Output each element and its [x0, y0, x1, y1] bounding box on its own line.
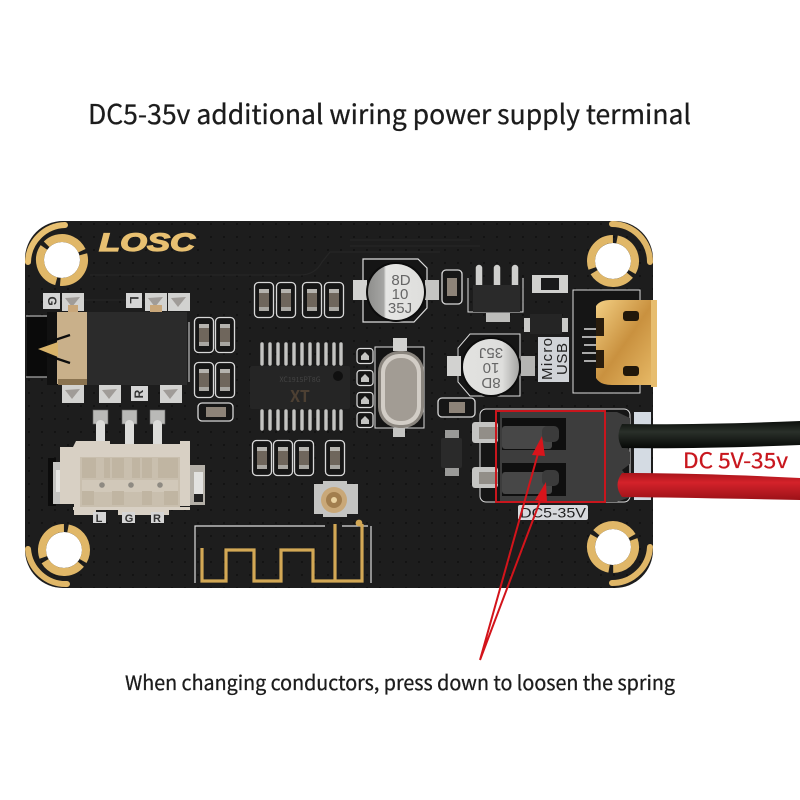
capacitor 2: 35J	[479, 344, 503, 361]
red voltage label: DC 5V-35v	[683, 445, 788, 475]
antenna u.fl connector	[314, 481, 358, 517]
audio jack: R	[132, 389, 146, 398]
logo LOSC: LOSC	[99, 229, 196, 257]
spring lever 1	[502, 418, 566, 450]
Micro USB silk label: USB	[554, 343, 571, 375]
pins	[93, 410, 165, 424]
audio jack: G	[45, 296, 59, 306]
capacitor 2: 10	[483, 359, 499, 376]
title: DC5-35v additional wiring power supply terminal	[88, 93, 691, 132]
capacitor 1	[353, 259, 439, 322]
mounting hole: top right	[582, 224, 650, 292]
smd resistors	[194, 282, 344, 476]
crystal	[357, 338, 424, 437]
spring terminal block	[500, 412, 630, 502]
micro USB port	[573, 290, 657, 393]
capacitor 1: 10	[392, 286, 408, 303]
voltage regulator	[442, 268, 568, 334]
IC chip: XC1915PT8G	[279, 375, 321, 385]
pads and labels	[43, 293, 60, 309]
black wire	[618, 421, 800, 448]
red highlight box	[496, 411, 605, 502]
audio jack: L	[127, 296, 141, 304]
caption: When changing conductors, press down to loosen the spring	[125, 667, 675, 696]
Micro USB silk label	[538, 337, 571, 382]
housing	[60, 441, 190, 515]
capacitor 2: 8D	[481, 374, 501, 391]
mounting hole: top left	[28, 225, 89, 287]
antenna outline	[195, 520, 371, 583]
terminal outline and pads	[472, 409, 630, 502]
spring lever 2	[502, 463, 566, 496]
JST connector: G	[125, 513, 133, 525]
Micro USB silk label: Micro	[539, 338, 556, 380]
connector labels	[93, 512, 106, 523]
JST connector: L	[96, 513, 103, 525]
JST connector	[48, 410, 205, 525]
white side strip	[634, 412, 651, 500]
audio jack	[26, 293, 190, 403]
mounting hole: bottom right	[585, 519, 650, 583]
bottom pins	[262, 411, 341, 429]
IC chip	[250, 344, 350, 429]
red wire	[618, 473, 800, 500]
capacitor 1: 35J	[388, 300, 412, 317]
red arrows	[480, 436, 547, 660]
DC5-35V silk label: DC5-35V	[520, 504, 587, 520]
top pins	[262, 344, 341, 364]
capacitor 1: 8D	[391, 272, 411, 289]
capacitor 2	[447, 334, 535, 397]
pcb board	[25, 221, 653, 588]
mounting hole: bottom left	[28, 519, 95, 584]
side pads	[48, 458, 56, 506]
small capacitor and diode	[438, 398, 475, 476]
IC chip: XT	[290, 383, 310, 407]
bluetooth antenna trace	[202, 524, 362, 581]
JST connector: R	[153, 513, 161, 525]
copper traces	[60, 240, 480, 300]
